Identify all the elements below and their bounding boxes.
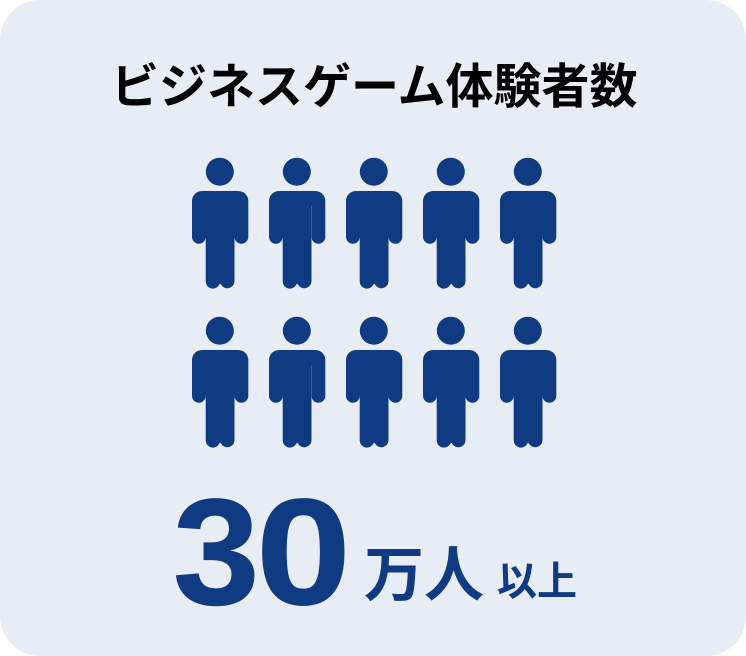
big number: 3	[172, 467, 259, 636]
person row 2	[192, 317, 556, 448]
unit: 万人: 万人	[364, 542, 484, 609]
suffix: 以上: 以上	[497, 560, 577, 604]
title: ビジネスゲーム体験者数	[111, 61, 638, 114]
person row 1	[192, 158, 556, 289]
big number: 0	[256, 467, 351, 636]
